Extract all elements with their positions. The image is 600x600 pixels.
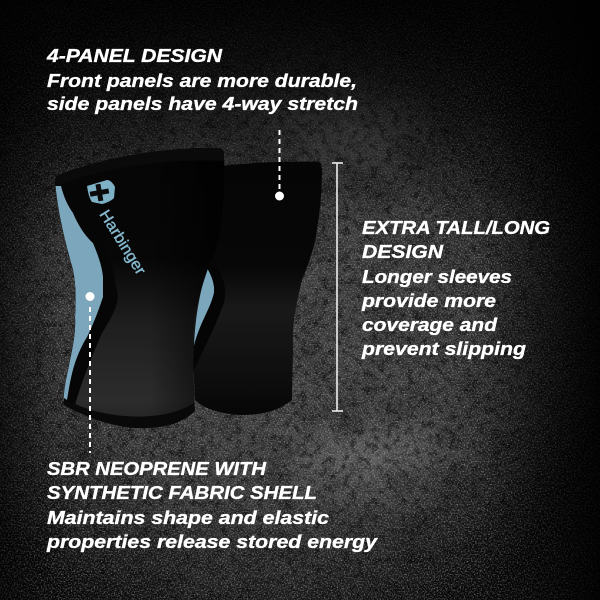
text: maintains shape: Maintains shape and elastic <box>47 508 329 528</box>
front sleeve bottom band <box>64 398 195 428</box>
heading: 4-panel design: 4-PANEL DESIGN <box>46 46 223 66</box>
text: side panels line: side panels have 4-way stretch <box>47 94 358 114</box>
rear sleeve blue side panel <box>194 268 214 346</box>
text: prevent slipping: prevent slipping <box>361 339 526 359</box>
dashed leader: bottom <box>86 292 94 453</box>
text: provide more: provide more <box>361 291 496 311</box>
dashed leader: top <box>275 130 284 200</box>
heading: design: DESIGN <box>362 242 444 262</box>
heading: synthetic fabric shell: SYNTHETIC FABRIC SHELL <box>47 483 317 503</box>
heading: extra tall/long: EXTRA TALL/LONG <box>362 218 550 238</box>
text: coverage and: coverage and <box>362 315 498 335</box>
height bracket <box>332 163 343 411</box>
front sleeve top band <box>55 148 224 186</box>
front sleeve blue side panel <box>55 186 103 402</box>
logo: hexagon with cross <box>87 180 115 204</box>
front sleeve black seam <box>62 226 118 404</box>
heading: SBR neoprene: SBR NEOPRENE WITH <box>47 459 267 479</box>
text: front panels line: Front panels are more durable, <box>47 71 357 91</box>
front knee sleeve <box>50 140 230 430</box>
rear sleeve black seam <box>193 262 225 372</box>
rear knee sleeve <box>190 162 322 415</box>
text: longer sleeves: Longer sleeves <box>362 267 512 287</box>
logo wordmark: Harbinger <box>96 207 149 278</box>
text: properties: properties release stored energy <box>46 532 378 552</box>
front sleeve right shading <box>168 148 224 412</box>
